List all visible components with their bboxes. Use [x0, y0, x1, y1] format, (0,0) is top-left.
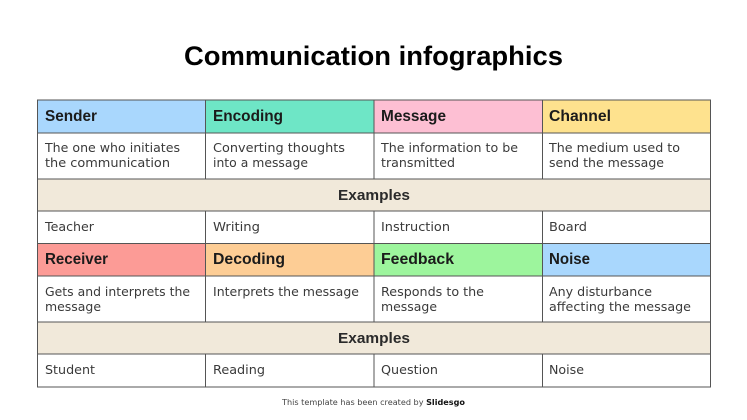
example: Reading: Reading — [213, 362, 265, 377]
description: Noise: affecting the message — [549, 299, 691, 314]
header: Noise — [542, 244, 710, 276]
description: Feedback: Responds to the — [381, 284, 484, 299]
title: Communication infographics — [184, 41, 563, 71]
description: Message — [380, 140, 518, 170]
header: Feedback — [374, 244, 542, 276]
description: Feedback: message — [381, 299, 437, 314]
panel: top row headers — [38, 100, 710, 133]
header: Noise: Noise — [549, 251, 590, 268]
header: Feedback: Feedback — [381, 251, 454, 268]
description: Encoding: into a message — [213, 155, 308, 170]
header: Message — [374, 100, 542, 133]
description: Encoding: Converting thoughts — [213, 140, 345, 155]
panel: top row examples — [44, 219, 587, 234]
header: Message: Message — [381, 108, 446, 125]
header: Sender: Sender — [45, 108, 97, 125]
header: Decoding: Decoding — [213, 251, 285, 268]
header: Receiver — [38, 244, 206, 276]
description: Channel — [548, 140, 680, 170]
band: Examples bottom — [38, 322, 710, 354]
example: Instruction: Instruction — [381, 219, 450, 234]
example: Question: Question — [381, 362, 438, 377]
description: Noise: Any disturbance — [549, 284, 652, 299]
description: Receiver — [45, 284, 190, 314]
header: Receiver: Receiver — [45, 251, 108, 268]
description: Feedback — [381, 284, 484, 314]
header: Decoding — [206, 244, 374, 276]
example: Student: Student — [45, 362, 95, 377]
panel: bottom row descriptions — [45, 284, 691, 314]
header: Encoding — [206, 100, 374, 133]
footer credit: This template has been created by Slidesgo — [281, 398, 466, 407]
header: Channel: Channel — [549, 108, 611, 125]
example: Teacher: Teacher — [44, 219, 95, 234]
description: Receiver: Gets and interprets the — [45, 284, 190, 299]
description: Channel: The medium used to — [548, 140, 680, 155]
description: Sender: The one who initiates — [44, 140, 180, 155]
description: Channel: send the message — [549, 155, 664, 170]
example: Board: Board — [549, 219, 587, 234]
description: Decoding: Interprets the message — [213, 284, 359, 299]
example: Noise: Noise — [549, 362, 584, 377]
header: Sender — [38, 100, 206, 133]
description: Message: The information to be — [380, 140, 518, 155]
band: Examples bottom: Examples — [338, 330, 410, 347]
description: Message: transmitted — [381, 155, 455, 170]
description: Sender — [44, 140, 180, 170]
panel: bottom row headers — [38, 244, 710, 276]
description: Receiver: message — [45, 299, 101, 314]
example: Writing: Writing — [213, 219, 260, 234]
band: Examples top: Examples — [338, 187, 410, 204]
description: Encoding — [213, 140, 345, 170]
table — [38, 100, 710, 387]
band: Examples top — [38, 179, 710, 211]
panel: bottom row examples — [45, 362, 584, 377]
panel: top row descriptions — [44, 140, 680, 170]
description: Sender: the communication — [45, 155, 170, 170]
header: Channel — [542, 100, 710, 133]
description: Noise — [549, 284, 691, 314]
header: Encoding: Encoding — [213, 108, 283, 125]
